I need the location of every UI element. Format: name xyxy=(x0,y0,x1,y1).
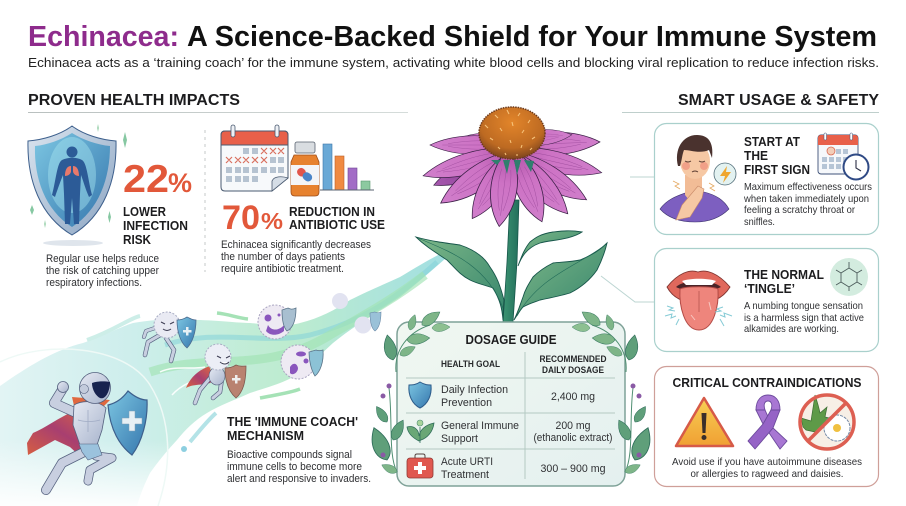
row: general immune support: General Immune xyxy=(441,420,519,432)
icon: alkamide molecule xyxy=(830,258,868,296)
heading: critical contraindications: CRITICAL CONTRAINDICATIONS xyxy=(672,376,862,390)
text: echinacea decreases: require antibiotic treatment. xyxy=(221,263,344,275)
text: bioactive compounds xyxy=(227,449,371,485)
row: general immune support: (ethanolic extract) xyxy=(534,432,612,444)
heading: start at the first sign: FIRST SIGN xyxy=(744,163,810,177)
row: daily infection prevention xyxy=(409,382,595,409)
row: general immune support: Support xyxy=(441,433,478,445)
foliage right xyxy=(572,308,656,476)
text: bioactive compounds: alert and responsive to invaders. xyxy=(227,473,371,485)
heading: start at the first sign: THE xyxy=(744,149,768,163)
text: numbing tongue: alkamides are working. xyxy=(744,323,839,335)
row: acute urti treatment: Treatment xyxy=(441,469,489,481)
table header: HEALTH GOAL xyxy=(441,359,500,369)
heading: immune coach mechanism: THE 'IMMUNE COACH' xyxy=(227,415,358,429)
heading: the normal tingle xyxy=(744,268,824,296)
leaf left xyxy=(416,237,504,320)
row: daily infection prevention: Prevention xyxy=(441,397,492,409)
text: echinacea decreases: the number of days patients xyxy=(221,251,345,263)
icon: no ragweed or daisies xyxy=(800,395,854,449)
heading: the normal tingle: THE NORMAL xyxy=(744,268,824,282)
text: maximum effectiveness: when taken immediately upon xyxy=(743,193,869,205)
label: lower infection risk: RISK xyxy=(123,233,151,247)
table header: RECOMMENDED xyxy=(540,354,607,364)
icon: pill bottle xyxy=(291,142,319,196)
text: bioactive compounds: immune cells to become more xyxy=(227,461,362,473)
icon: warning triangle xyxy=(676,398,733,446)
row: daily infection prevention: 2,400 mg xyxy=(551,391,595,403)
heading: the normal tingle: ‘TINGLE’ xyxy=(744,282,795,296)
panel: start at the first sign xyxy=(654,124,878,234)
stat: 70 percent: 70 xyxy=(222,199,260,237)
illustration: echinacea flower xyxy=(416,107,607,322)
icon: purple ribbon xyxy=(748,395,787,449)
stem xyxy=(503,200,519,322)
panel: dosage guide xyxy=(366,308,656,486)
heading: start at the first sign xyxy=(744,135,810,177)
label: lower infection risk: LOWER xyxy=(123,205,166,219)
leaf right xyxy=(514,243,607,320)
stat: 22 percent: % xyxy=(168,168,192,198)
stat: 70 percent xyxy=(222,199,283,237)
heading: immune coach mechanism: MECHANISM xyxy=(227,429,304,443)
chart: decreasing bars xyxy=(320,144,374,190)
label: reduction in antibiotic use xyxy=(289,205,385,232)
illustration: energy stream xyxy=(0,253,446,506)
icon: calendar xyxy=(221,125,288,191)
stat: 70 percent: % xyxy=(261,208,283,234)
leaf middle xyxy=(518,231,582,266)
cone xyxy=(479,107,545,159)
heading: immune coach mechanism xyxy=(227,415,358,443)
heading: proven health impacts: PROVEN HEALTH IMPACTS xyxy=(28,92,240,109)
subtitle: Echinacea acts as a ‘training coach’ for the immune system, activating white blood cells and blocking viral replication to reduce infection risks. xyxy=(28,55,879,70)
text: numbing tongue xyxy=(744,300,864,335)
row: general immune support xyxy=(407,420,612,445)
icon: sick person xyxy=(660,135,736,222)
heading: start at the first sign: START AT xyxy=(744,135,800,149)
text: maximum effectiveness: Maximum effectiveness occurs xyxy=(744,181,872,193)
text: echinacea decreases xyxy=(221,239,371,275)
row: daily infection prevention: Daily Infection xyxy=(441,384,508,396)
icon: shield with body xyxy=(28,124,127,246)
text: bioactive compounds: Bioactive compounds signal xyxy=(227,449,352,461)
icon: calendar and clock xyxy=(818,133,868,180)
panel: the normal tingle xyxy=(654,248,878,352)
table header: DAILY DOSAGE xyxy=(542,365,604,375)
row: acute urti treatment: Acute URTI xyxy=(441,456,493,468)
title: A Science-Backed Shield for Your Immune System xyxy=(187,21,877,53)
dosage title: DOSAGE GUIDE xyxy=(466,332,557,347)
text: avoid use xyxy=(672,456,862,480)
row: acute urti treatment xyxy=(407,454,606,481)
table header xyxy=(441,354,607,375)
text: regular use: the risk of catching upper xyxy=(46,265,159,277)
stat: 22 percent: 22 xyxy=(123,158,169,201)
label: reduction in antibiotic use: ANTIBIOTIC USE xyxy=(289,218,385,232)
text: regular use: Regular use helps reduce xyxy=(46,253,159,265)
text: maximum effectiveness xyxy=(743,181,872,228)
row: general immune support: 200 mg xyxy=(556,420,590,432)
petals xyxy=(512,131,600,156)
text: regular use xyxy=(46,253,159,289)
stat: 22 percent xyxy=(123,158,192,201)
text: numbing tongue: A numbing tongue sensation xyxy=(744,300,863,312)
label: lower infection risk: INFECTION xyxy=(123,219,188,233)
text: avoid use: Avoid use if you have autoimmune diseases xyxy=(672,456,862,468)
icon: tongue xyxy=(665,271,732,330)
title: Echinacea: xyxy=(28,21,179,53)
label: lower infection risk xyxy=(123,205,188,247)
illustration: running cell with shield xyxy=(144,312,196,361)
text: maximum effectiveness: sniffles. xyxy=(744,216,775,228)
text: regular use: respiratory infections. xyxy=(46,277,142,289)
row: acute urti treatment: 300 – 900 mg xyxy=(540,463,606,475)
text: numbing tongue: is a harmless sign that active xyxy=(744,312,864,324)
illustration: caped cell with shield xyxy=(186,344,246,403)
heading: smart usage and safety: SMART USAGE & SAFETY xyxy=(678,92,880,109)
text: echinacea decreases: Echinacea significantly decreases xyxy=(221,239,371,251)
illustration: neutrophil cells xyxy=(258,293,381,379)
label: reduction in antibiotic use: REDUCTION IN xyxy=(289,205,375,219)
illustration: hero immune coach xyxy=(27,372,147,490)
text: avoid use: or allergies to ragweed and daisies. xyxy=(690,468,844,480)
text: maximum effectiveness: feeling a scratchy throat or xyxy=(744,204,855,216)
panel: critical contraindications xyxy=(654,366,878,486)
foliage left xyxy=(366,308,450,476)
